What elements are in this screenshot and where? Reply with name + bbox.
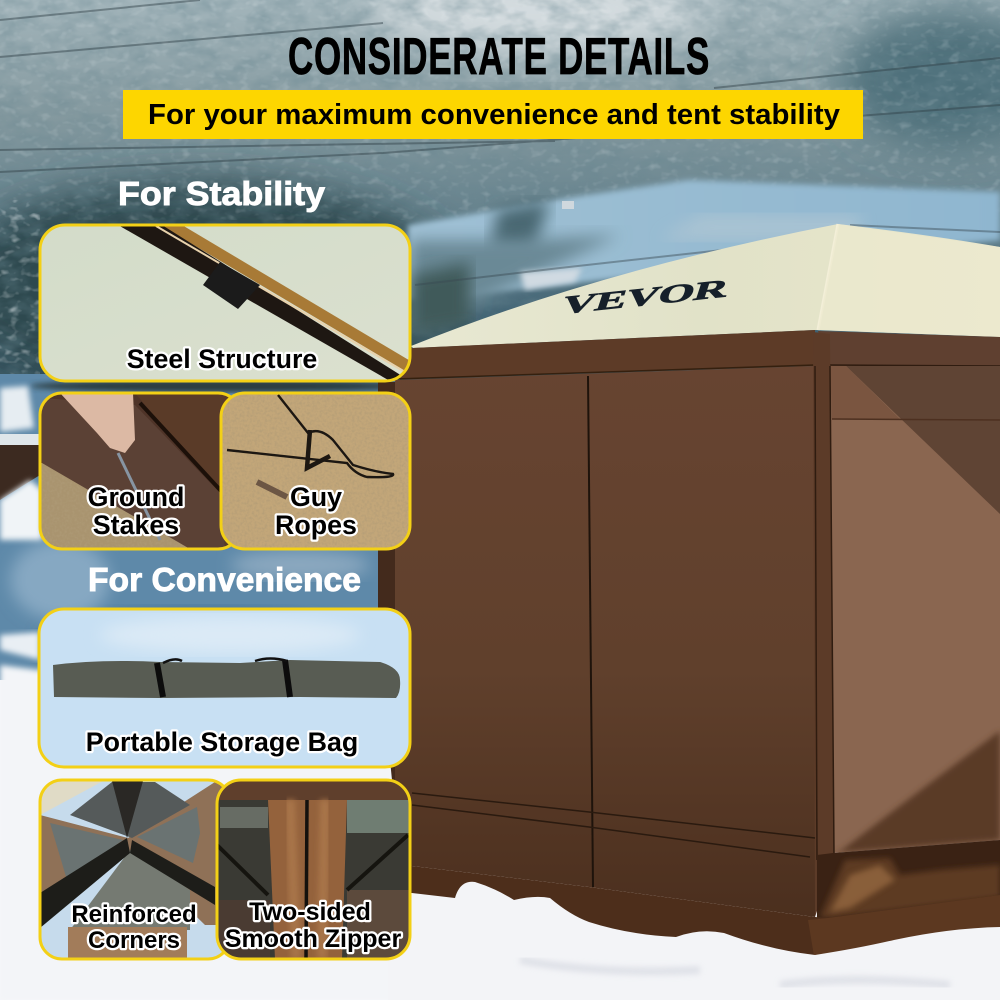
heading: for convenience: For Convenience [88, 561, 361, 598]
label: Portable Storage Bag [86, 727, 358, 757]
tent roof [411, 224, 1000, 348]
label: Guy [290, 482, 342, 512]
label: Two-sided [249, 898, 371, 926]
panel: two-sided smooth zipper [217, 780, 410, 959]
corner post [813, 332, 834, 917]
front wall [395, 366, 815, 917]
panel: guy ropes: Ropes [275, 510, 357, 540]
banner: For your maximum convenience and tent stability [148, 99, 840, 131]
label: Reinforced [71, 901, 197, 928]
panel: guy ropes [221, 393, 410, 549]
front valance [395, 330, 815, 379]
label: Steel Structure [127, 344, 317, 374]
panel: reinforced corners: Corners [88, 927, 180, 954]
panel: ground stakes: Stakes [93, 510, 179, 540]
banner [123, 90, 863, 139]
left post [378, 382, 400, 880]
heading: for stability: For Stability [118, 175, 326, 212]
panel: portable storage bag [39, 609, 410, 767]
door seam [588, 376, 593, 887]
title: CONSIDERATE DETAILS [288, 27, 710, 85]
brand logo: VEVOR [558, 274, 734, 320]
side valance [818, 331, 1000, 366]
side panel [830, 366, 1000, 853]
lower seams [412, 793, 815, 857]
label: Ground [88, 482, 184, 512]
panel: two-sided smooth zipper: Smooth Zipper [225, 925, 401, 953]
panel: ground stakes [40, 393, 240, 549]
snow [388, 882, 1000, 1000]
panel: steel structure [40, 225, 412, 381]
tent [378, 224, 1000, 1000]
panel: reinforced corners [40, 780, 230, 959]
storage bag [53, 660, 400, 698]
under-panel pleats [817, 840, 1000, 920]
floor skirt [395, 864, 1000, 962]
